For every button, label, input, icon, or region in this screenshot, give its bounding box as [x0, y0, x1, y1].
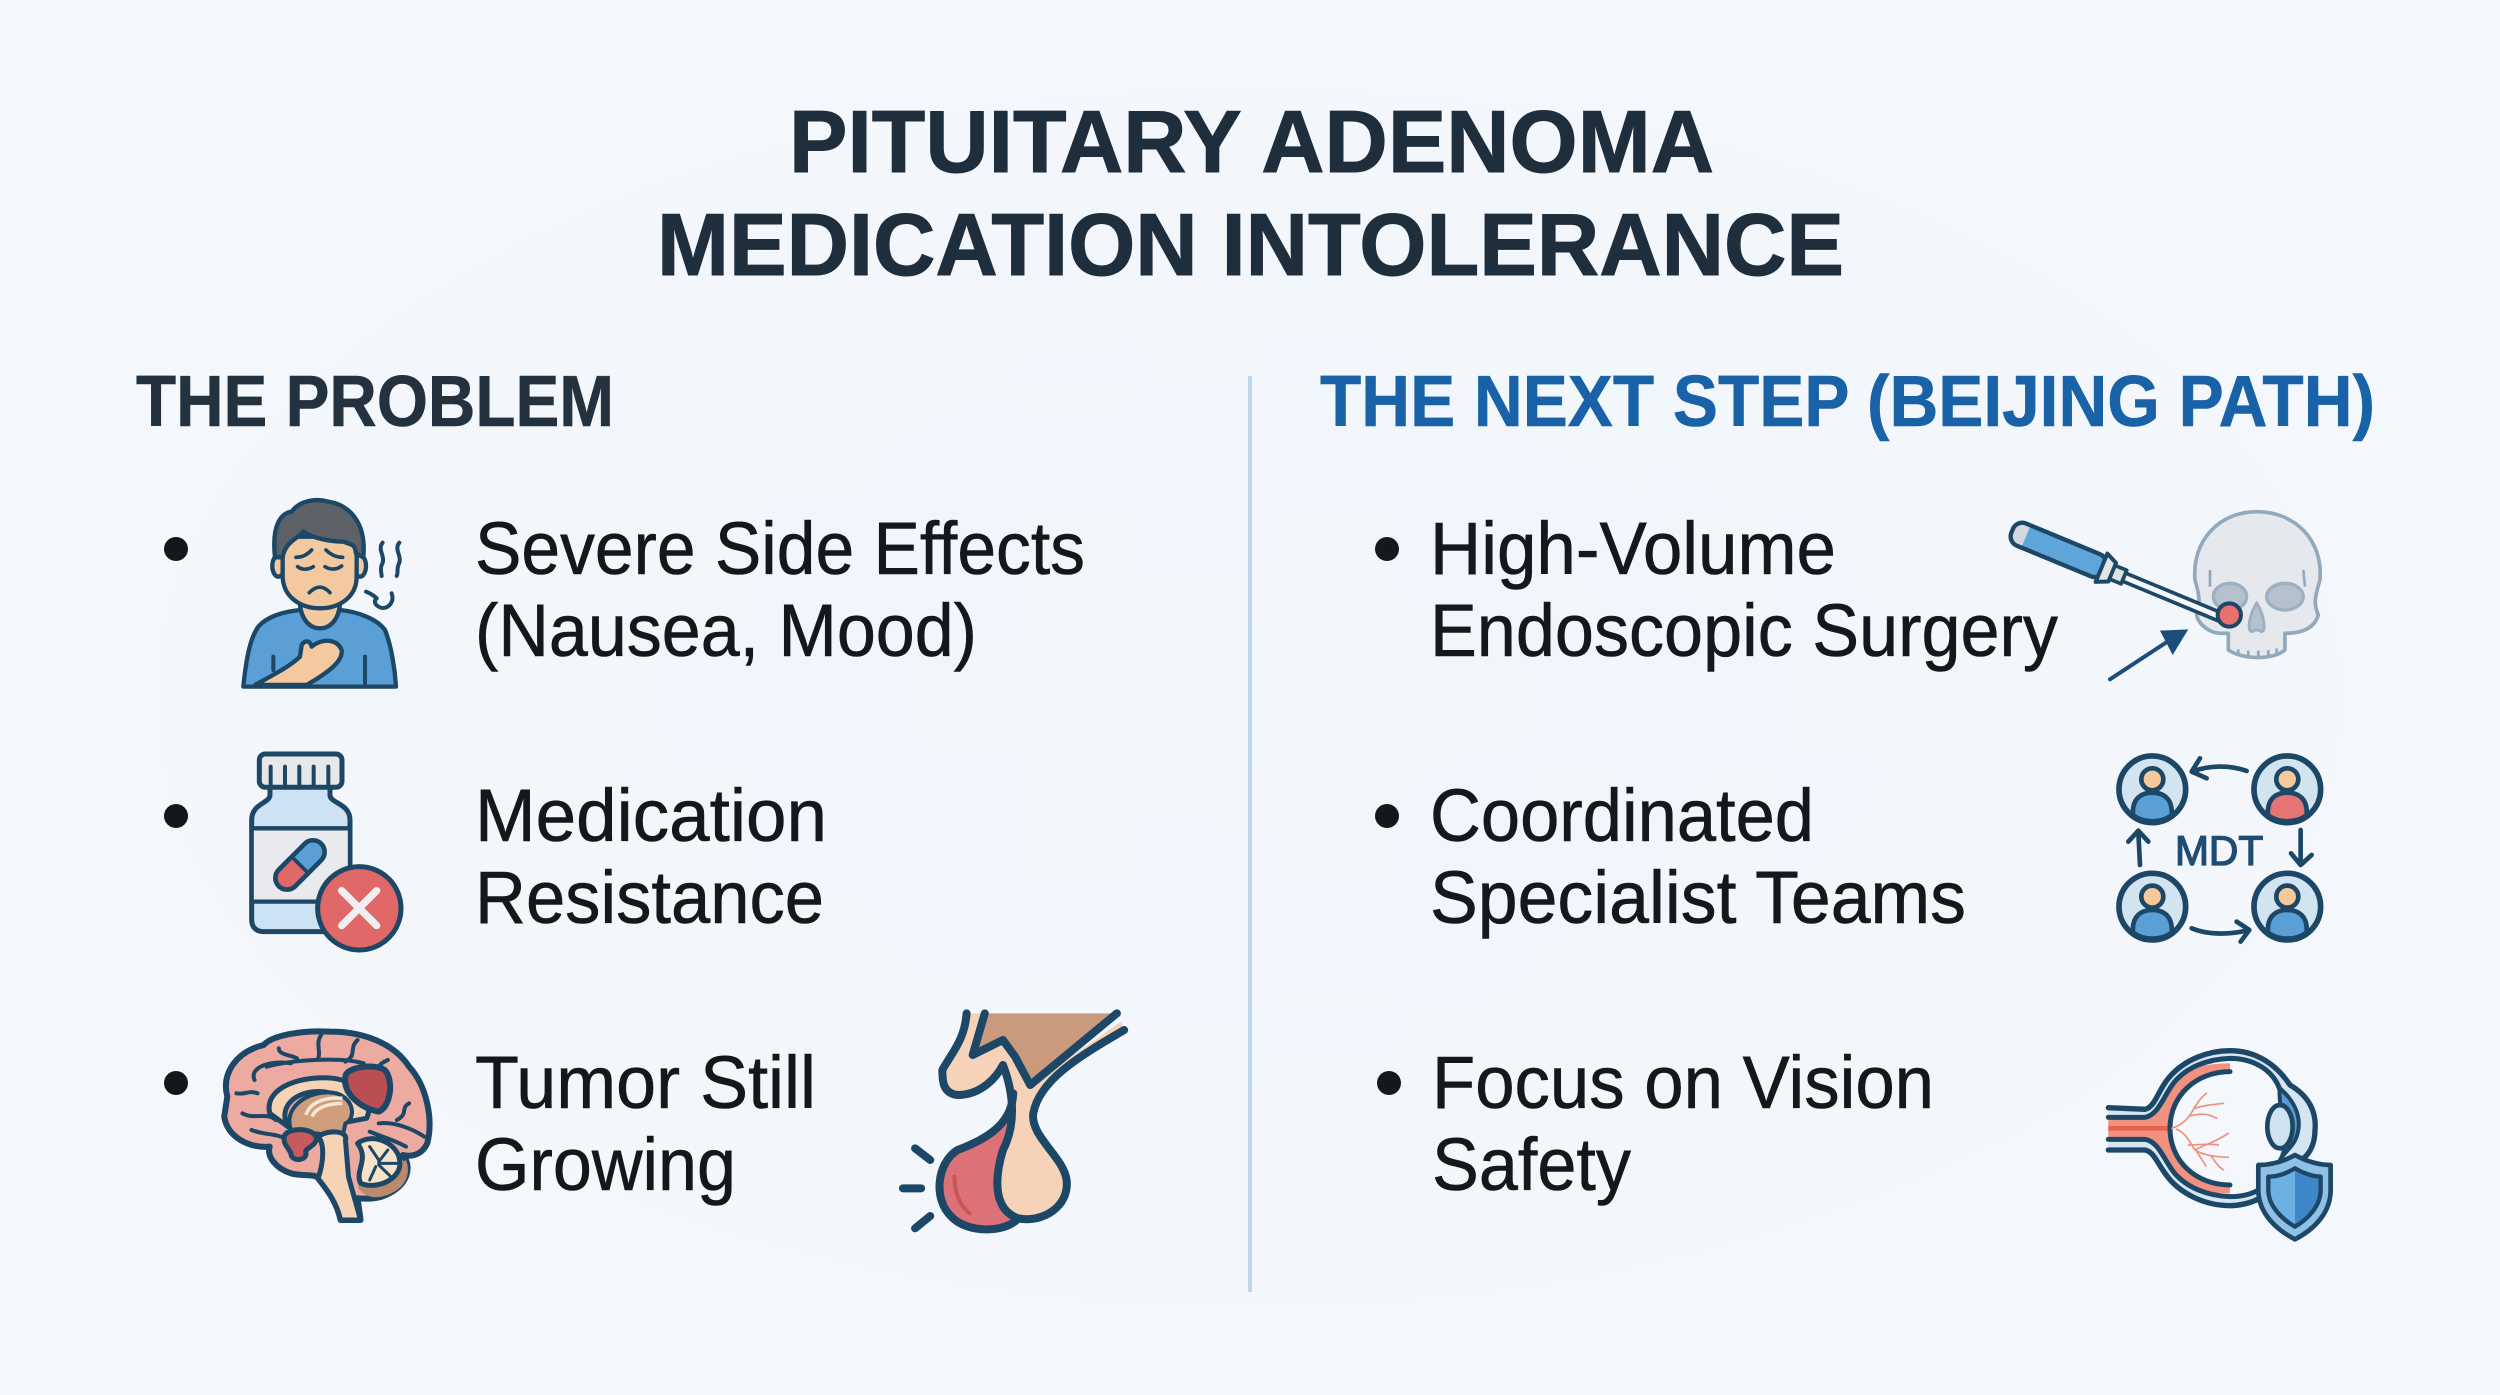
text: endoscopic surgery [1430, 507, 2058, 672]
icon: endoscope and skull [2005, 512, 2320, 679]
text: tumor still growing [475, 1041, 816, 1206]
icon: eye with shield [2108, 1051, 2331, 1239]
item: severe side effects [164, 500, 400, 687]
text: coordinated teams [1430, 774, 1966, 939]
icon: MDT team cycle: MDT [2175, 827, 2263, 874]
icon: brain with tumors [224, 1031, 430, 1220]
text: vision safety: Safety [1432, 1123, 1631, 1206]
text: coordinated teams: Specialist Teams [1430, 856, 1966, 939]
item: vision safety [1377, 1051, 2331, 1239]
text: severe side effects: (Nausea, Mood) [475, 589, 977, 672]
item: endoscopic surgery [1375, 512, 2320, 679]
title [657, 92, 1844, 294]
text: endoscopic surgery: High-Volume [1430, 507, 1836, 590]
title: PITUITARY ADENOMA [789, 92, 1714, 191]
icon: MDT team cycle [2119, 756, 2321, 942]
panel: the next step [1320, 362, 2375, 1239]
text: coordinated teams: Coordinated [1430, 774, 1814, 857]
item: coordinated teams [1375, 756, 2321, 942]
icon: nauseous person [243, 500, 400, 687]
item: medication resistance [164, 754, 401, 950]
text: medication resistance: Resistance [475, 856, 824, 939]
heading: the next step: THE NEXT STEP (BEIJING PATH) [1320, 362, 2375, 442]
text: severe side effects [475, 507, 1085, 672]
icon: pill bottle with cross [252, 754, 401, 950]
text: tumor still growing: Tumor Still [475, 1041, 816, 1124]
text: medication resistance [475, 774, 827, 939]
text: severe side effects: Severe Side Effects [475, 507, 1085, 590]
text: medication resistance: Medication [475, 774, 827, 857]
icon: pituitary gland [903, 1013, 1124, 1229]
panel: the problem [136, 362, 1124, 1229]
heading: the problem: THE PROBLEM [136, 362, 614, 442]
text: endoscopic surgery: Endoscopic Surgery [1430, 589, 2058, 672]
item: tumor still growing [164, 1013, 1124, 1229]
title: MEDICATION INTOLERANCE [657, 195, 1844, 294]
text: vision safety: Focus on Vision [1432, 1041, 1934, 1124]
text: tumor still growing: Growing [475, 1123, 736, 1206]
text: vision safety [1432, 1041, 1934, 1206]
